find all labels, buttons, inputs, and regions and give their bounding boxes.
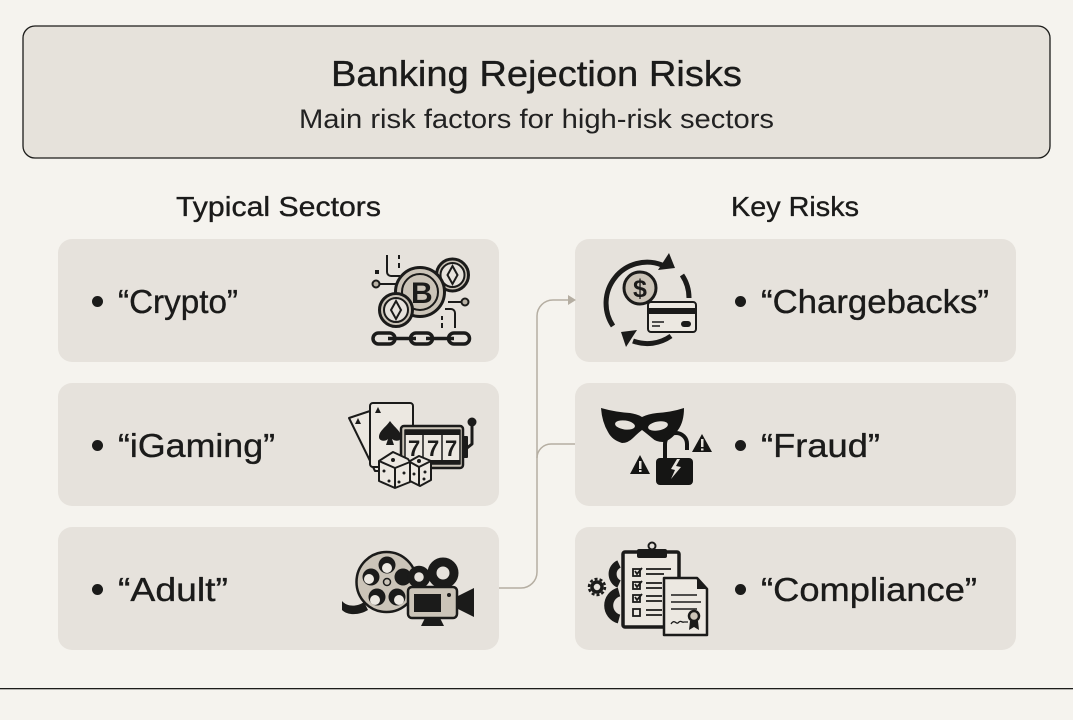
subtitle: Main risk factors for high-risk sectors xyxy=(299,104,774,134)
panel: fraud xyxy=(575,383,1016,506)
heading: typical sectors: Typical Sectors xyxy=(176,191,381,222)
panel: crypto xyxy=(58,239,499,362)
panel: crypto: B xyxy=(411,277,433,310)
bullet xyxy=(735,440,746,451)
panel: compliance xyxy=(575,527,1016,650)
panel: igaming xyxy=(58,383,499,506)
label: crypto: “Crypto” xyxy=(118,283,238,320)
bullet xyxy=(735,296,746,307)
label: compliance: “Compliance” xyxy=(761,571,977,608)
icon: dollar coin, card and cycle arrows xyxy=(606,253,696,347)
bullet xyxy=(735,584,746,595)
icon: cards, slot machine and dice: 7 xyxy=(445,436,457,461)
icon: gears, clipboard and certificate xyxy=(589,542,707,635)
connector arrows: adult to chargebacks and fraud xyxy=(499,295,576,588)
footer rule xyxy=(0,688,1073,689)
title panel xyxy=(23,26,1050,158)
icon: cards, slot machine and dice xyxy=(349,403,476,488)
panel: adult xyxy=(58,527,499,650)
panel: chargebacks: $ xyxy=(633,275,647,303)
title: Banking Rejection Risks xyxy=(331,53,742,94)
icon: cards, slot machine and dice: 7 xyxy=(408,436,420,461)
bullet xyxy=(92,296,103,307)
icon: crypto coins and chain xyxy=(372,255,470,344)
label: igaming: “iGaming” xyxy=(118,427,275,464)
label: adult: “Adult” xyxy=(118,571,228,608)
icon: mask, broken lock and warnings xyxy=(601,408,712,485)
label: fraud: “Fraud” xyxy=(761,427,880,464)
icon: cards, slot machine and dice: 7 xyxy=(427,436,439,461)
bullet xyxy=(92,584,103,595)
bullet xyxy=(92,440,103,451)
icon: film reel and camera xyxy=(342,552,474,626)
label: chargebacks: “Chargebacks” xyxy=(761,283,989,320)
panel: chargebacks xyxy=(575,239,1016,362)
heading: key risks: Key Risks xyxy=(731,191,859,222)
